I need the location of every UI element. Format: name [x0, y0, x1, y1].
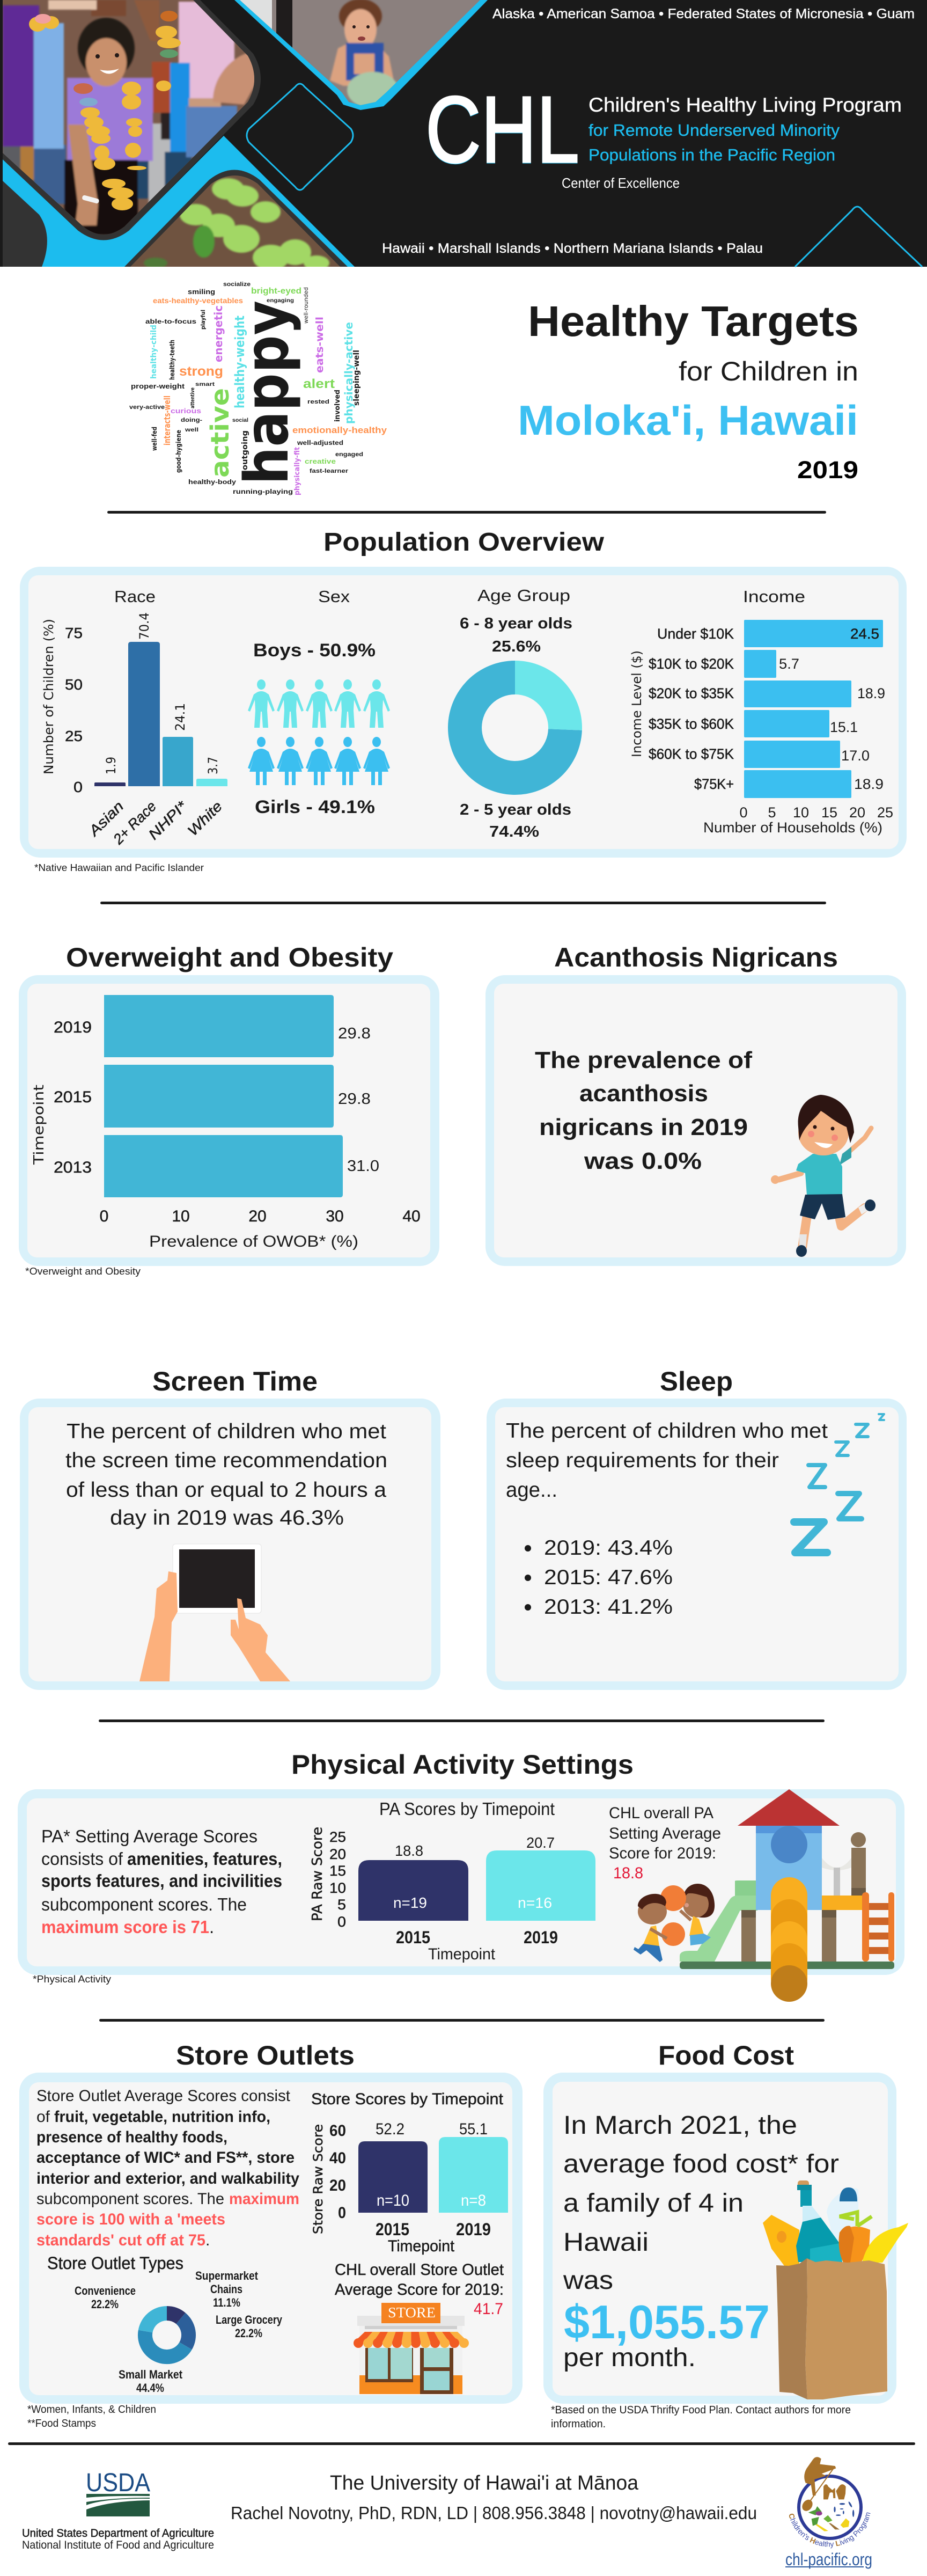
contact block: The University of Hawai'i at Mānoa — [330, 2472, 639, 2494]
CHL logo — [785, 2457, 872, 2569]
PA scores bar chart: 25 — [329, 1829, 346, 1845]
word cloud: sleeping-well — [352, 350, 361, 406]
panel: acanthosis nigricans: was 0.0% — [584, 1148, 702, 1174]
word cloud: well-rounded — [303, 287, 310, 324]
age group donut: 74.4% — [489, 823, 539, 840]
word cloud: good-hygiene — [175, 430, 182, 473]
heading: sleep: Sleep — [660, 1366, 733, 1396]
PA description text: amenities, features, — [127, 1849, 282, 1869]
CHL overall PA score: CHL overall PA — [609, 1804, 713, 1822]
sex pictogram — [248, 587, 390, 817]
PA scores bar chart: PA Raw Score — [310, 1827, 326, 1921]
word cloud: healthy-teeth — [168, 340, 176, 380]
CHL wordmark: CHL — [425, 77, 579, 182]
footnotes: WIC and FS: *Women, Infants, & Children — [27, 2404, 156, 2416]
income bar chart: 5.7 — [779, 656, 799, 672]
header banner — [0, 0, 927, 270]
main title block: for Children in — [679, 356, 858, 386]
word cloud: smart — [195, 382, 215, 387]
income bar chart: Number of Households (%) — [703, 819, 882, 836]
header member list bottom: Hawaii • Marshall Islands • Northern Mariana Islands • Palau — [382, 241, 763, 256]
main title block: 2019 — [797, 456, 858, 484]
CHL overall PA score — [609, 1804, 721, 1882]
income bar chart — [629, 587, 893, 836]
PA scores bar chart: PA Scores by Timepoint — [379, 1799, 555, 1819]
panel: overweight and obesity chart: 2013 — [54, 1159, 92, 1176]
word cloud: fast-learner — [310, 468, 349, 474]
panel: store outlets — [19, 2073, 523, 2404]
word cloud: smiling — [188, 288, 215, 296]
PA description text: sports features, and incivilities — [41, 1871, 282, 1891]
decorative triangle outline — [795, 207, 922, 267]
word cloud: involved — [334, 390, 342, 422]
CHL overall store score — [335, 2261, 504, 2318]
USDA logo: National Institute of Food and Agriculture — [22, 2539, 214, 2551]
panel: screen time: the screen time recommendation — [65, 1449, 387, 1472]
CHL logo: chl-pacific.org — [785, 2550, 872, 2569]
word cloud: healthy-weight — [232, 316, 247, 408]
race chart: White — [185, 798, 225, 839]
word cloud: well-fed — [151, 427, 158, 451]
income bar chart: 20 — [849, 804, 865, 821]
sleep percentages list: 2015: 47.6% — [544, 1566, 673, 1589]
store outlet types donut: Chains — [210, 2282, 242, 2296]
heading: physical activity settings: Physical Activity Settings — [291, 1750, 634, 1780]
program tagline line 2: Populations in the Pacific Region — [588, 145, 835, 164]
race chart: 70.4 — [137, 612, 152, 640]
panel: food cost: $1,055.57 — [564, 2295, 770, 2348]
word cloud: rested — [307, 399, 329, 405]
income bar chart: $60K to $75K — [649, 746, 734, 762]
age group donut: Age Group — [477, 586, 570, 605]
word cloud: running-playing — [233, 488, 293, 495]
income bar chart: Income Level ($) — [629, 650, 644, 757]
icon: tablet and hands — [139, 1544, 290, 1681]
footnote: food plan: *Based on the USDA Thrifty Food Plan. Contact authors for more — [551, 2404, 851, 2416]
store scores bar chart: 20 — [329, 2177, 346, 2194]
icon: storefront: STORE — [388, 2304, 436, 2321]
store outlet types donut: Small Market — [119, 2368, 183, 2381]
race chart: NHPI* — [145, 797, 190, 843]
panel: acanthosis nigricans: The prevalence of — [535, 1047, 752, 1073]
word cloud: engaging — [267, 298, 294, 304]
race chart: 2+ Race — [110, 798, 159, 848]
income bar chart: Under $10K — [657, 626, 734, 642]
store outlet types donut: 22.2% — [235, 2326, 262, 2340]
word cloud: creative — [305, 457, 336, 465]
word cloud: very-active — [129, 404, 165, 411]
PA scores bar chart: n=16 — [518, 1894, 552, 1911]
word cloud: physically-active — [342, 322, 355, 424]
panel: overweight and obesity chart: 2015 — [54, 1088, 92, 1106]
footnote: food plan — [551, 2404, 851, 2430]
PA scores bar chart: 20 — [329, 1846, 346, 1862]
store description text — [36, 2087, 299, 2249]
race chart: 0 — [73, 779, 83, 795]
PA description text: consists of — [41, 1849, 123, 1869]
store outlet types donut: 44.4% — [136, 2381, 164, 2395]
panel: population overview — [20, 567, 907, 858]
panel: overweight and obesity chart: 29.8 — [338, 1025, 371, 1042]
panel: sleep: The percent of children who met — [506, 1419, 828, 1443]
income bar chart: $20K to $35K — [649, 685, 734, 701]
income bar chart: 18.9 — [857, 685, 885, 701]
PA description text: PA* Setting Average Scores — [41, 1826, 258, 1846]
sex pictogram: Girls - 49.1% — [255, 797, 375, 817]
PA scores bar chart: Timepoint — [428, 1945, 496, 1963]
word cloud: eats-healthy-vegetables — [153, 296, 243, 305]
word cloud: playful — [200, 310, 207, 330]
panel: sleep: sleep requirements for their — [506, 1449, 779, 1472]
footnotes: WIC and FS: **Food Stamps — [27, 2418, 96, 2429]
word cloud: eats-well — [314, 317, 326, 373]
store scores bar chart: 60 — [329, 2122, 346, 2140]
photo: lettuce rows — [123, 166, 349, 270]
store description text: of — [36, 2108, 50, 2126]
panel: overweight and obesity chart: Timepoint — [31, 1085, 47, 1165]
main title block: Moloka'i, Hawaii — [518, 397, 858, 444]
panel: overweight and obesity chart: 29.8 — [338, 1091, 371, 1108]
word cloud: physically-fit — [293, 447, 301, 495]
word cloud: energetic — [212, 305, 225, 362]
PA scores bar chart: 2015 — [396, 1928, 430, 1947]
bottom-left grey corner — [3, 181, 47, 267]
USDA logo: United States Department of Agriculture — [22, 2527, 214, 2540]
store outlet types donut — [47, 2253, 283, 2395]
panel: overweight and obesity chart: 40 — [402, 1208, 421, 1225]
sleep percentages list — [525, 1536, 673, 1619]
footnotes: WIC and FS — [27, 2404, 156, 2429]
word cloud: emotionally-healthy — [292, 425, 387, 435]
panel: food cost: Hawaii — [563, 2228, 649, 2257]
main title block: Healthy Targets — [528, 297, 859, 345]
income bar chart: 15.1 — [830, 719, 858, 735]
contact block: Rachel Novotny, PhD, RDN, LD | 808.956.3848 | novotny@hawaii.edu — [231, 2503, 757, 2523]
panel: overweight and obesity chart: 31.0 — [347, 1158, 379, 1175]
race chart: 1.9 — [104, 757, 119, 774]
panel: overweight and obesity chart: Prevalence of OWOB* (%) — [149, 1233, 358, 1250]
store description text: maximum — [229, 2190, 299, 2208]
CHL logo: Children's Healthy Living Program — [789, 2513, 870, 2548]
store description text: subcomponent scores. The — [36, 2190, 224, 2208]
race chart: 75 — [65, 625, 83, 641]
icon: grocery bag — [763, 2180, 908, 2399]
panel: sleep — [487, 1399, 907, 1690]
CHL overall PA score: Score for 2019: — [609, 1845, 716, 1862]
panel: acanthosis nigricans: nigricans in 2019 — [539, 1114, 748, 1140]
race chart: 3.7 — [205, 757, 220, 774]
panel: sleep: age... — [506, 1479, 557, 1502]
income bar chart: 0 — [739, 804, 748, 821]
age group donut: 2 - 5 year olds — [460, 801, 571, 818]
store description text: fruit, vegetable, nutrition info, — [54, 2108, 270, 2126]
icon: girl with ball — [660, 1884, 715, 1945]
panel: overweight and obesity chart: 0 — [100, 1208, 108, 1225]
word cloud: outgoing — [241, 430, 249, 470]
store outlet types donut: Supermarket — [195, 2269, 259, 2282]
PA description text — [41, 1826, 282, 1937]
store scores bar chart — [311, 2090, 508, 2255]
decorative diamond outline — [247, 84, 353, 190]
store scores bar chart: 52.2 — [376, 2120, 404, 2138]
panel: overweight and obesity chart — [19, 975, 439, 1266]
panel: food cost: was — [563, 2266, 613, 2295]
footnote: OWOB: *Overweight and Obesity — [25, 1266, 141, 1277]
store outlet types donut: Large Grocery — [216, 2313, 283, 2326]
income bar chart: 18.9 — [854, 776, 884, 792]
PA scores bar chart: 15 — [329, 1863, 346, 1879]
store scores bar chart: Store Raw Score — [311, 2124, 326, 2234]
word cloud: socialize — [223, 281, 251, 288]
panel: overweight and obesity chart: 2019 — [54, 1019, 92, 1036]
word cloud — [129, 281, 387, 495]
word cloud: doing- — [181, 417, 202, 423]
main title block — [518, 297, 859, 484]
PA scores bar chart: 0 — [337, 1914, 346, 1930]
word cloud: healthy-child — [150, 325, 158, 379]
word cloud: interacts-well — [162, 396, 172, 445]
panel: food cost: In March 2021, the — [563, 2111, 797, 2140]
store description text: score is 100 with a 'meets — [36, 2211, 225, 2228]
footnote: PA: *Physical Activity — [33, 1974, 111, 1985]
race chart: Race — [114, 587, 156, 606]
store description text: acceptance of WIC* and FS**, store — [36, 2149, 295, 2167]
income bar chart: $10K to $20K — [649, 656, 734, 672]
PA scores bar chart: 10 — [329, 1880, 346, 1896]
sleep percentages list: 2013: 41.2% — [544, 1596, 673, 1619]
income bar chart: 15 — [821, 804, 837, 821]
word cloud: well-adjusted — [297, 439, 343, 447]
store description text: . — [205, 2231, 210, 2249]
panel: overweight and obesity chart: 20 — [248, 1208, 267, 1225]
store description text: interior and exterior, and walkability — [36, 2170, 299, 2187]
PA scores bar chart: 2019 — [524, 1928, 558, 1947]
photo: toddler holding bag — [234, 0, 488, 113]
age group donut — [448, 586, 582, 840]
panel: acanthosis nigricans: acanthosis — [579, 1080, 708, 1107]
race chart — [41, 587, 227, 848]
race chart: Number of Children (%) — [41, 619, 56, 774]
income bar chart: Income — [743, 587, 805, 606]
income bar chart: 24.5 — [850, 626, 879, 642]
PA description text: . — [209, 1917, 214, 1937]
store scores bar chart: Timepoint — [388, 2237, 455, 2255]
income bar chart: 10 — [793, 804, 809, 821]
heading: population overview: Population Overview — [323, 528, 605, 557]
store outlet types donut: 22.2% — [91, 2297, 119, 2311]
store scores bar chart: n=10 — [377, 2192, 409, 2209]
USDA logo: USDA — [86, 2469, 150, 2497]
center of excellence: Center of Excellence — [562, 175, 680, 191]
word cloud: strong — [179, 364, 223, 379]
cyan ribbon shape — [3, 136, 355, 267]
word cloud: proper-weight — [131, 382, 185, 390]
CHL overall store score: Average Score for 2019: — [335, 2281, 504, 2299]
panel: screen time: The percent of children who met — [67, 1420, 386, 1443]
contact block — [231, 2472, 757, 2523]
word cloud: engaged — [335, 451, 363, 458]
heading: screen time: Screen Time — [152, 1366, 318, 1396]
PA description text: maximum score is 71 — [41, 1917, 209, 1937]
word cloud: social — [232, 418, 248, 423]
heading: food cost: Food Cost — [658, 2040, 794, 2070]
store scores bar chart: Store Scores by Timepoint — [311, 2090, 504, 2108]
sex pictogram: Boys - 50.9% — [253, 640, 376, 661]
store description text: presence of healthy foods, — [36, 2128, 227, 2146]
store scores bar chart: 40 — [329, 2149, 346, 2167]
footnote: NHPI: *Native Hawaiian and Pacific Islander — [34, 862, 204, 873]
sleep percentages list: 2019: 43.4% — [544, 1536, 673, 1560]
USDA logo — [22, 2469, 214, 2551]
panel: food cost: average food cost* for — [563, 2150, 839, 2178]
store scores bar chart: n=8 — [461, 2192, 486, 2209]
store description text: Store Outlet Average Scores consist — [36, 2087, 291, 2105]
panel: screen time: day in 2019 was 46.3% — [110, 1506, 344, 1529]
CHL overall store score: CHL overall Store Outlet — [335, 2261, 504, 2279]
income bar chart: 17.0 — [841, 748, 870, 764]
race chart: 25 — [65, 728, 83, 744]
word cloud: active — [205, 388, 234, 478]
panel: screen time — [20, 1399, 440, 1690]
word cloud: alert — [303, 377, 335, 391]
panel: overweight and obesity chart: 30 — [326, 1208, 344, 1225]
income bar chart: 5 — [768, 804, 776, 821]
race chart: 24.1 — [173, 703, 188, 731]
income bar chart: 25 — [877, 804, 893, 821]
panel: food cost — [543, 2073, 908, 2404]
CHL overall store score: 41.7 — [474, 2300, 503, 2318]
header member list top: Alaska • American Samoa • Federated States of Micronesia • Guam — [492, 6, 915, 21]
age group donut: 6 - 8 year olds — [460, 615, 572, 632]
word cloud: happy — [232, 301, 302, 485]
store outlet types donut: Store Outlet Types — [47, 2253, 183, 2273]
icon: storefront — [354, 2303, 469, 2394]
income bar chart: $35K to $60K — [649, 716, 734, 732]
store description text: standards' cut off at 75 — [36, 2231, 205, 2249]
icon: boy with ball — [634, 1894, 685, 1962]
store scores bar chart: 2019 — [456, 2220, 491, 2239]
word cloud: curious — [171, 407, 201, 415]
panel: physical activity settings — [18, 1789, 904, 1975]
heading: overweight and obesity: Overweight and Obesity — [66, 942, 393, 972]
income bar chart: $75K+ — [694, 776, 734, 792]
store scores bar chart: 0 — [338, 2204, 346, 2222]
footnote: food plan: information. — [551, 2418, 606, 2430]
CHL overall PA score: 18.8 — [613, 1864, 643, 1882]
word cloud: bright-eyed — [251, 287, 301, 296]
PA scores bar chart: 20.7 — [526, 1834, 555, 1851]
PA scores bar chart — [310, 1799, 595, 1963]
word cloud: well — [185, 427, 198, 433]
race chart: 50 — [65, 676, 83, 693]
panel: food cost: a family of 4 in — [563, 2189, 744, 2218]
heading: acanthosis nigricans: Acanthosis Nigricans — [554, 942, 838, 972]
panel: food cost: per month. — [563, 2344, 696, 2372]
program name: Children's Healthy Living Program — [588, 94, 902, 116]
age group donut: 25.6% — [492, 638, 541, 655]
heading: store outlets: Store Outlets — [176, 2040, 355, 2070]
race chart: Asian — [85, 798, 127, 840]
word cloud: able-to-focus — [145, 318, 196, 325]
CHL overall PA score: Setting Average — [609, 1825, 721, 1842]
icon: running boy — [771, 1095, 876, 1257]
icon: sleeping z's — [794, 1414, 884, 1553]
panel: overweight and obesity chart: 10 — [172, 1208, 190, 1225]
store outlet types donut: Convenience — [75, 2284, 136, 2297]
word cloud: attentive — [190, 387, 196, 408]
PA scores bar chart: n=19 — [393, 1894, 427, 1911]
sex pictogram: Sex — [318, 587, 350, 606]
photo: children with leis — [0, 0, 268, 241]
program tagline line 1: for Remote Underserved Minority — [588, 121, 840, 140]
PA scores bar chart: 5 — [337, 1897, 346, 1913]
word cloud: healthy-body — [188, 478, 236, 486]
store outlet types donut: 11.1% — [213, 2296, 240, 2309]
store scores bar chart: 55.1 — [459, 2120, 488, 2138]
PA scores bar chart: 18.8 — [395, 1842, 423, 1859]
panel: acanthosis nigricans — [485, 975, 906, 1266]
panel: screen time: of less than or equal to 2 hours a — [66, 1479, 386, 1502]
PA description text: subcomponent scores. The — [41, 1894, 247, 1914]
icon: playground with children — [634, 1789, 894, 2002]
store scores bar chart: 2015 — [376, 2220, 409, 2239]
